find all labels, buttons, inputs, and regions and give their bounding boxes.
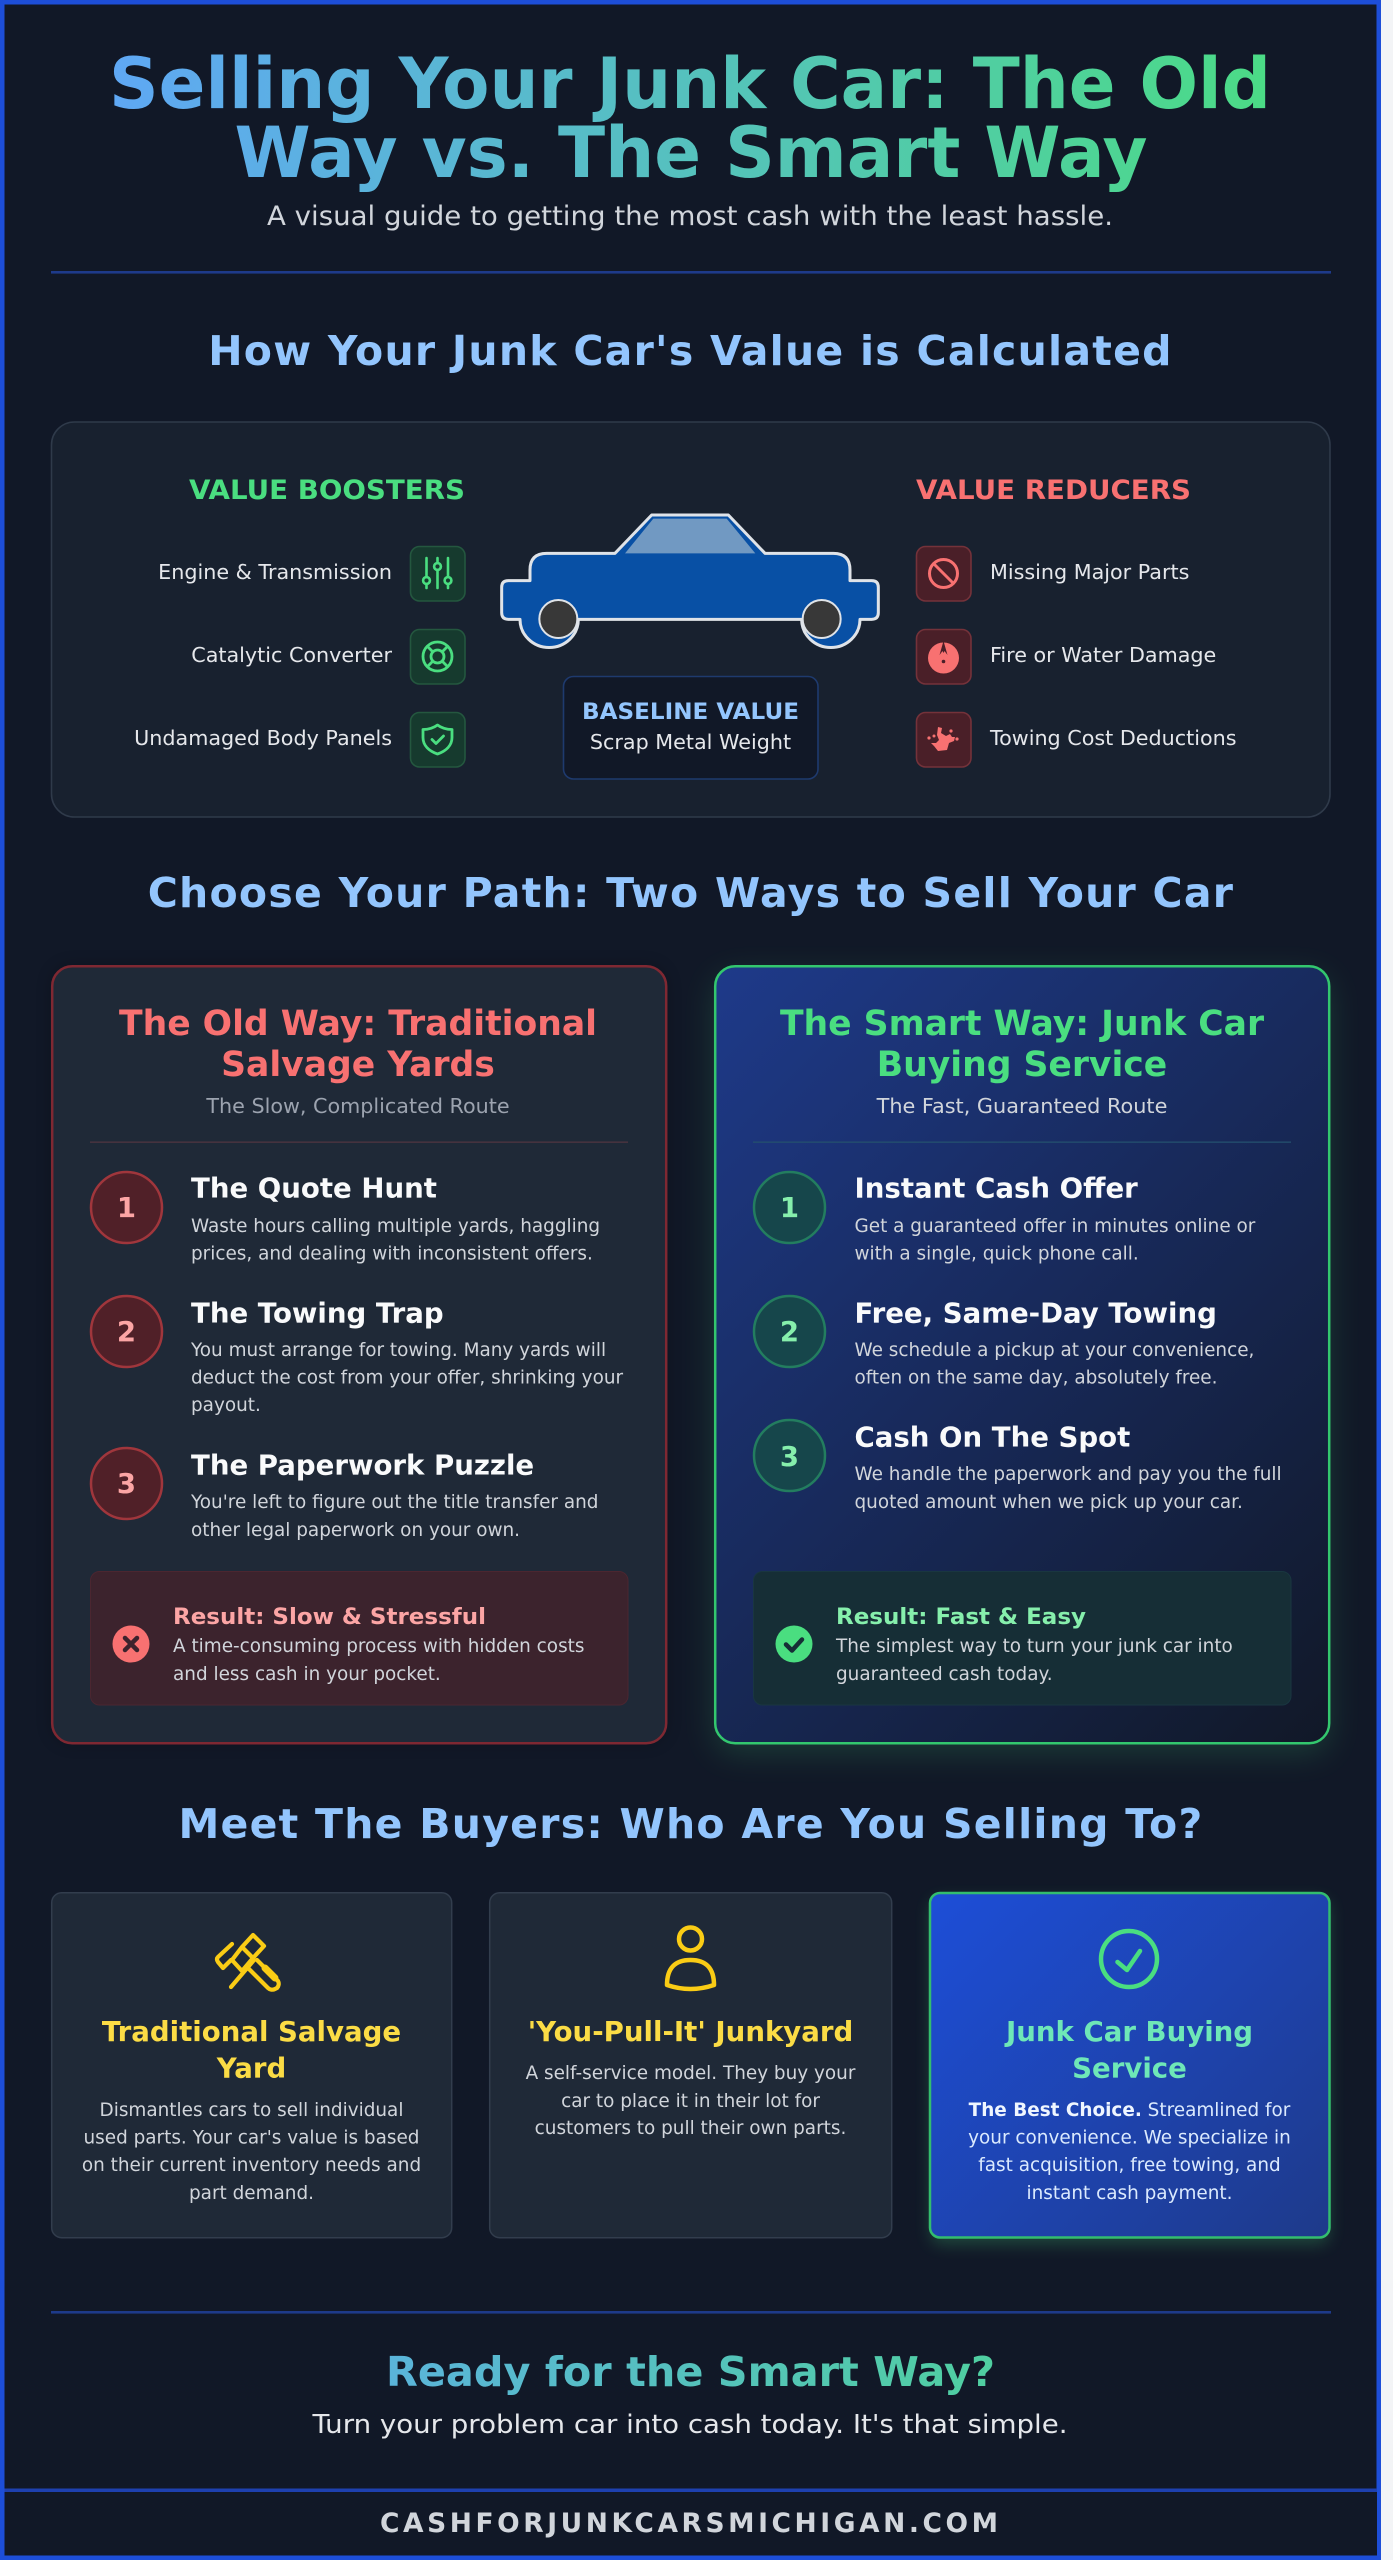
call to action: Turn your problem car into cash today. It's that simple.	[311, 2410, 1068, 2440]
value reducers column	[916, 475, 1237, 767]
icon: car illustration	[502, 515, 878, 647]
buyer card: you-pull-it junkyard: A self-service model. They buy your	[526, 2063, 856, 2084]
booster: undamaged body panels	[134, 712, 465, 767]
smart step 3: quoted amount when we pick up your car.	[854, 1492, 1243, 1513]
reducer: towing cost deductions: Towing Cost Deductions	[989, 726, 1237, 750]
smart step 2: Free, Same-Day Towing	[854, 1296, 1217, 1330]
smart step 2: 2	[780, 1316, 799, 1348]
old step 3: You're left to figure out the title transfer and	[190, 1492, 598, 1513]
booster: catalytic converter	[191, 630, 465, 684]
booster: catalytic converter: Catalytic Converter	[191, 643, 392, 667]
old result callout: Result: Slow & Stressful	[173, 1604, 486, 1630]
buyer card: you-pull-it junkyard: 'You-Pull-It' Junkyard	[528, 2015, 853, 2048]
call to action: Ready for the Smart Way?	[386, 2348, 995, 2396]
buyer card: junk car buying service	[930, 1893, 1330, 2244]
smart result callout: The simplest way to turn your junk car into	[835, 1636, 1233, 1657]
smart step 3: Cash On The Spot	[854, 1420, 1130, 1454]
old step 3	[91, 1448, 598, 1541]
footer: CASHFORJUNKCARSMICHIGAN.COM	[380, 2508, 998, 2539]
old step 2: deduct the cost from your offer, shrinking your	[191, 1368, 623, 1388]
header	[109, 43, 1271, 232]
buyer card: traditional salvage yard: Yard	[216, 2052, 286, 2084]
reducer: towing cost deductions	[916, 712, 1237, 767]
old step 2: 2	[117, 1316, 136, 1348]
value boosters column	[134, 475, 465, 767]
old way heading: The Old Way: Traditional	[119, 1004, 597, 1044]
buyer card: you-pull-it junkyard	[490, 1893, 892, 2238]
buyer card: traditional salvage yard	[52, 1893, 452, 2238]
smart result callout: guaranteed cash today.	[836, 1664, 1053, 1685]
old step 1: prices, and dealing with inconsistent offers.	[191, 1244, 593, 1264]
old step 3: 3	[117, 1468, 136, 1500]
heading: choose your path: Choose Your Path: Two Ways to Sell Your Car	[148, 869, 1234, 917]
panel: the smart way	[715, 966, 1329, 1753]
old result callout: and less cash in your pocket.	[173, 1664, 441, 1685]
heading: how value is calculated: How Your Junk Car's Value is Calculated	[208, 327, 1173, 375]
buyer card: junk car buying service: Junk Car Buying	[1004, 2015, 1253, 2048]
buyer card: traditional salvage yard: used parts. Your car's value is based	[83, 2128, 420, 2148]
smart step 3: We handle the paperwork and pay you the full	[854, 1464, 1282, 1485]
smart step 1: Get a guaranteed offer in minutes online or	[854, 1216, 1256, 1237]
old step 2: The Towing Trap	[191, 1296, 444, 1330]
booster: engine and transmission: Engine & Transmission	[158, 560, 392, 584]
title	[109, 43, 1271, 194]
panel: the old way	[52, 966, 666, 1743]
old step 2: You must arrange for towing. Many yards will	[190, 1340, 606, 1361]
icon: hammer and wrench	[217, 1935, 279, 1990]
subtitle: A visual guide to getting the most cash with the least hassle.	[267, 201, 1113, 232]
panel: value calculation	[52, 422, 1330, 817]
smart step 3	[754, 1420, 1282, 1513]
old step 2: payout.	[191, 1395, 261, 1416]
buyer card: traditional salvage yard: Dismantles cars to sell individual	[100, 2100, 403, 2121]
buyer card: junk car buying service: The Best Choice. Streamlined for	[969, 2100, 1291, 2121]
callout: baseline value: Scrap Metal Weight	[590, 730, 791, 754]
buyer card: traditional salvage yard: part demand.	[189, 2183, 314, 2204]
old way heading	[119, 1004, 597, 1118]
old step 1: The Quote Hunt	[191, 1172, 437, 1204]
smart way heading: The Fast, Guaranteed Route	[876, 1094, 1167, 1118]
reducer: fire or water damage	[916, 630, 1216, 684]
buyer card: you-pull-it junkyard: customers to pull their own parts.	[535, 2118, 846, 2139]
heading: meet the buyers: Meet The Buyers: Who Are You Selling To?	[178, 1800, 1204, 1848]
buyer card: junk car buying service: Service	[1072, 2052, 1187, 2084]
booster: engine and transmission	[158, 546, 465, 601]
smart way heading: The Smart Way: Junk Car	[780, 1004, 1264, 1044]
buyer card: traditional salvage yard: Traditional Salvage	[102, 2015, 401, 2048]
buyer card: junk car buying service: instant cash payment.	[1027, 2183, 1232, 2204]
buyer card: junk car buying service: fast acquisition, free towing, and	[978, 2155, 1281, 2176]
old way heading: The Slow, Complicated Route	[205, 1094, 510, 1118]
smart result callout	[754, 1572, 1291, 1705]
callout: baseline value: BASELINE VALUE	[582, 700, 799, 725]
old step 3: other legal paperwork on your own.	[191, 1520, 520, 1541]
old step 2	[91, 1296, 623, 1416]
reducers heading: VALUE REDUCERS	[916, 475, 1191, 506]
icon: check circle	[1101, 1931, 1157, 1987]
title: Way vs. The Smart Way	[234, 112, 1148, 194]
smart step 1: 1	[780, 1192, 799, 1224]
old way heading: Salvage Yards	[221, 1045, 495, 1085]
title: Selling Your Junk Car: The Old	[109, 43, 1271, 125]
callout: baseline value	[564, 676, 818, 779]
buyer card: traditional salvage yard: on their current inventory needs and	[82, 2155, 421, 2176]
smart step 2: often on the same day, absolutely free.	[854, 1368, 1217, 1388]
smart step 2	[754, 1296, 1254, 1388]
booster: undamaged body panels: Undamaged Body Panels	[134, 726, 392, 750]
reducer: missing major parts: Missing Major Parts	[990, 560, 1189, 584]
old step 1	[91, 1172, 600, 1264]
footer	[4, 2488, 1377, 2556]
smart result callout: Result: Fast & Easy	[836, 1604, 1086, 1630]
smart step 3: 3	[780, 1441, 799, 1473]
call to action	[311, 2348, 1068, 2440]
reducer: missing major parts	[916, 546, 1189, 601]
icon: person	[667, 1928, 714, 1989]
buyer card: junk car buying service: your convenience. We specialize in	[968, 2128, 1291, 2148]
old step 3: The Paperwork Puzzle	[191, 1448, 534, 1482]
smart step 1: Instant Cash Offer	[854, 1172, 1138, 1204]
old result callout	[90, 1572, 628, 1705]
buyer card: you-pull-it junkyard: car to place it in their lot for	[561, 2091, 820, 2112]
smart way heading	[780, 1004, 1264, 1118]
smart way heading: Buying Service	[877, 1045, 1167, 1085]
smart step 2: We schedule a pickup at your convenience,	[854, 1340, 1254, 1361]
boosters heading: VALUE BOOSTERS	[189, 475, 465, 506]
old result callout: A time-consuming process with hidden costs	[173, 1636, 584, 1657]
reducer: fire or water damage: Fire or Water Damage	[990, 643, 1216, 667]
old step 1: Waste hours calling multiple yards, haggling	[191, 1216, 600, 1237]
old step 1: 1	[117, 1192, 136, 1224]
smart step 1: with a single, quick phone call.	[854, 1244, 1139, 1264]
smart step 1	[754, 1172, 1256, 1264]
